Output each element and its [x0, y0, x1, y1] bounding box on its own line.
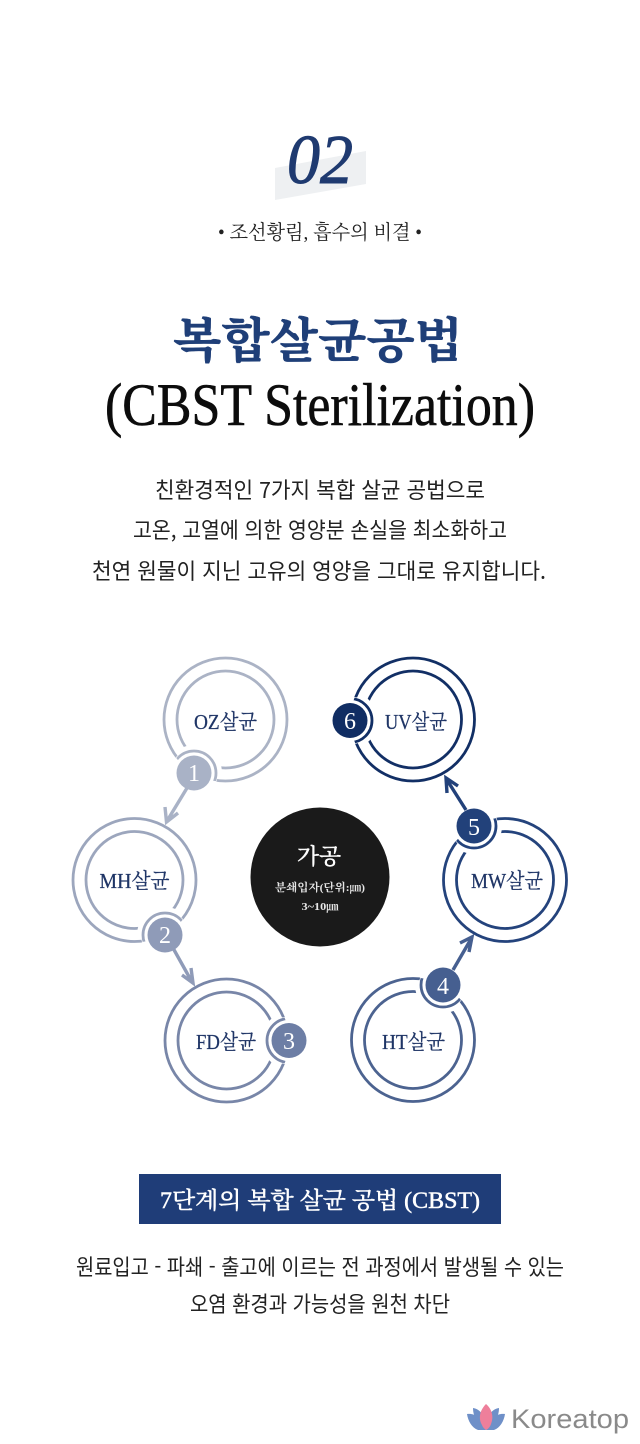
step 1: OZ sterilization — [164, 658, 287, 801]
intro text: 친환경적인 7가지 복합 살균 공법으로 — [155, 473, 485, 505]
step 6: UV sterilization — [322, 658, 474, 781]
banner: 7-step CBST — [139, 1174, 501, 1224]
intro text: 고온, 고열에 의한 영양분 손실을 최소화하고 — [133, 513, 507, 545]
arrow: step 1 to 2 — [165, 788, 187, 822]
arrow: step 4 to 5 — [453, 937, 472, 970]
step 4: HT sterilization — [352, 957, 474, 1102]
step 4: HT sterilization: 4 — [437, 974, 449, 1000]
closing text: 오염 환경과 가능성을 원천 차단 — [190, 1287, 450, 1319]
icon: lotus — [467, 1404, 505, 1430]
step 1: OZ sterilization: OZ살균 — [194, 710, 257, 734]
step 3: FD sterilization: FD살균 — [196, 1030, 256, 1054]
step 2: MH sterilization: 2 — [159, 923, 171, 949]
step 5: MW sterilization — [444, 798, 566, 942]
main title — [105, 315, 535, 438]
arrow: step 2 to 3 — [173, 948, 193, 983]
step 4: HT sterilization: HT살균 — [382, 1030, 445, 1054]
step 6: UV sterilization: UV살균 — [385, 710, 447, 734]
step 5: MW sterilization: 5 — [468, 815, 480, 841]
center processing circle: 3~10㎛ — [302, 901, 338, 913]
banner: 7-step CBST: 7단계의 복합 살균 공법 (CBST) — [160, 1188, 480, 1213]
cycle diagram — [73, 658, 566, 1102]
center processing circle: 가공 — [297, 844, 341, 869]
logo: Koreatop — [467, 1404, 629, 1434]
main title: (CBST Sterilization) — [105, 372, 535, 438]
intro text — [92, 473, 546, 586]
center processing circle: 분쇄입자(단위:㎛) — [275, 880, 365, 894]
section number 02: 02 — [287, 122, 353, 199]
step 3: FD sterilization — [165, 979, 317, 1102]
step 5: MW sterilization: MW살균 — [471, 869, 543, 893]
subtitle: • 조선황림, 흡수의 비결 • — [218, 220, 422, 244]
step 2: MH sterilization: MH살균 — [100, 869, 170, 893]
step 3: FD sterilization: 3 — [283, 1029, 295, 1055]
closing text: 원료입고 - 파쇄 - 출고에 이르는 전 과정에서 발생될 수 있는 — [76, 1250, 564, 1282]
logo: Koreatop: Koreatop — [511, 1404, 629, 1434]
arrow: step 5 to 6 — [446, 778, 466, 810]
step 2: MH sterilization — [73, 818, 196, 963]
main title: 복합살균공법 — [173, 315, 463, 368]
closing text — [76, 1250, 564, 1319]
step 6: UV sterilization: 6 — [344, 709, 356, 735]
center processing circle — [250, 808, 390, 946]
intro text: 천연 원물이 지닌 고유의 영양을 그대로 유지합니다. — [92, 554, 546, 586]
step 1: OZ sterilization: 1 — [188, 761, 200, 787]
